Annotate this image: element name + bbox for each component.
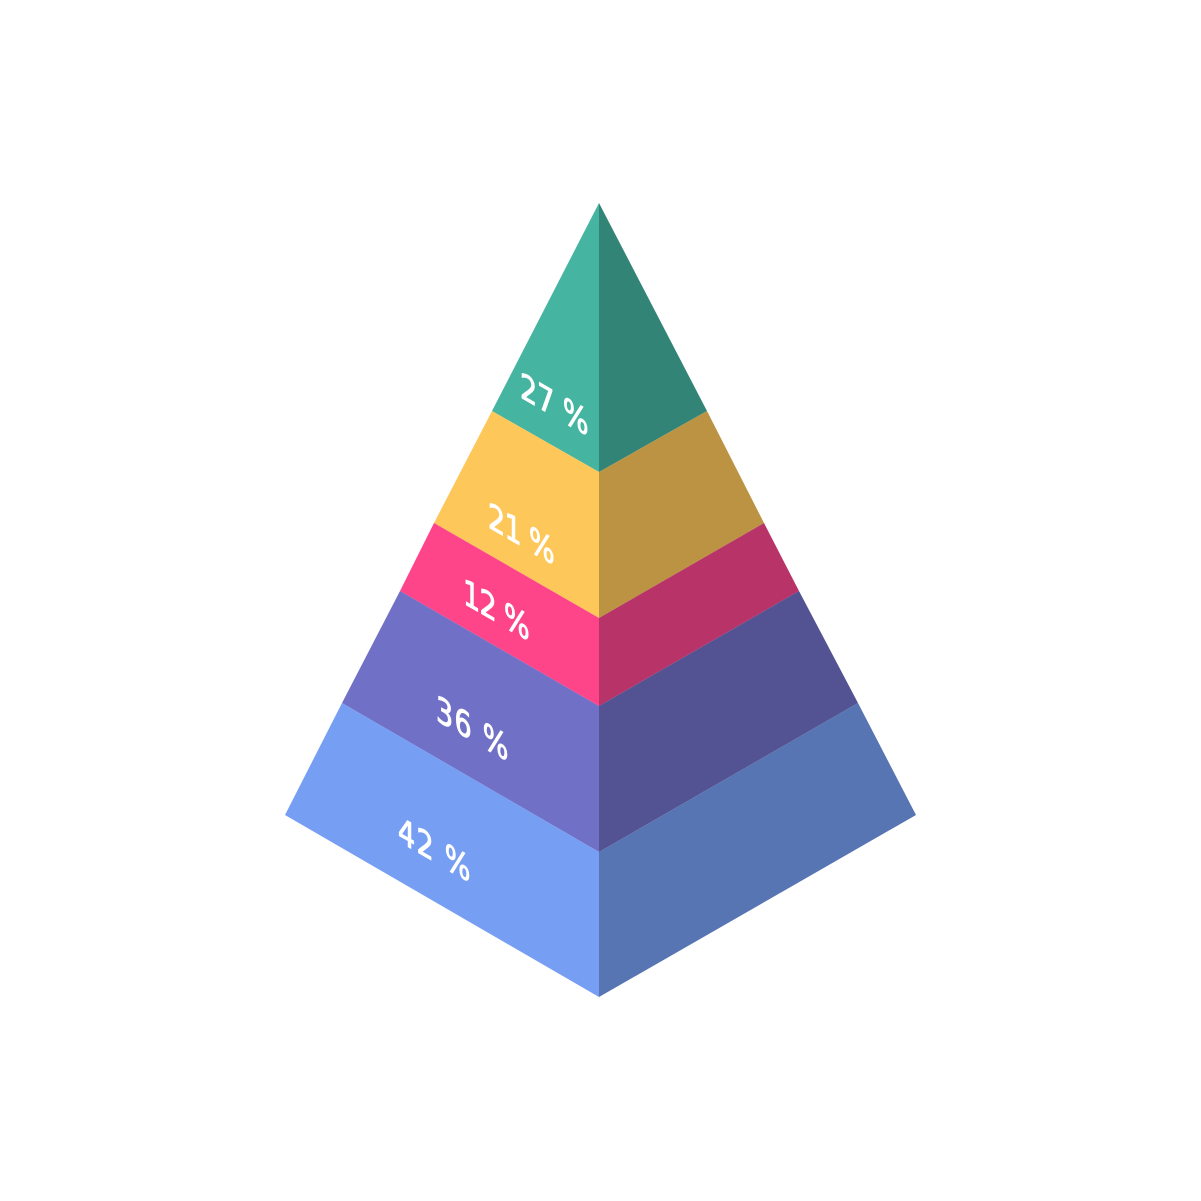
label: 36%: 36 % — [436, 687, 510, 771]
label: 27%: 27 % — [520, 364, 589, 445]
label: 42%: 42 % — [398, 808, 472, 892]
label: 21%: 21 % — [488, 494, 554, 573]
tier: 21% — [434, 411, 764, 618]
tier: 42% — [285, 703, 916, 997]
label: 12%: 12 % — [463, 570, 529, 649]
tier: 36% — [342, 591, 858, 852]
tier: top 27% — [492, 203, 707, 472]
tier: 12% — [400, 523, 799, 706]
